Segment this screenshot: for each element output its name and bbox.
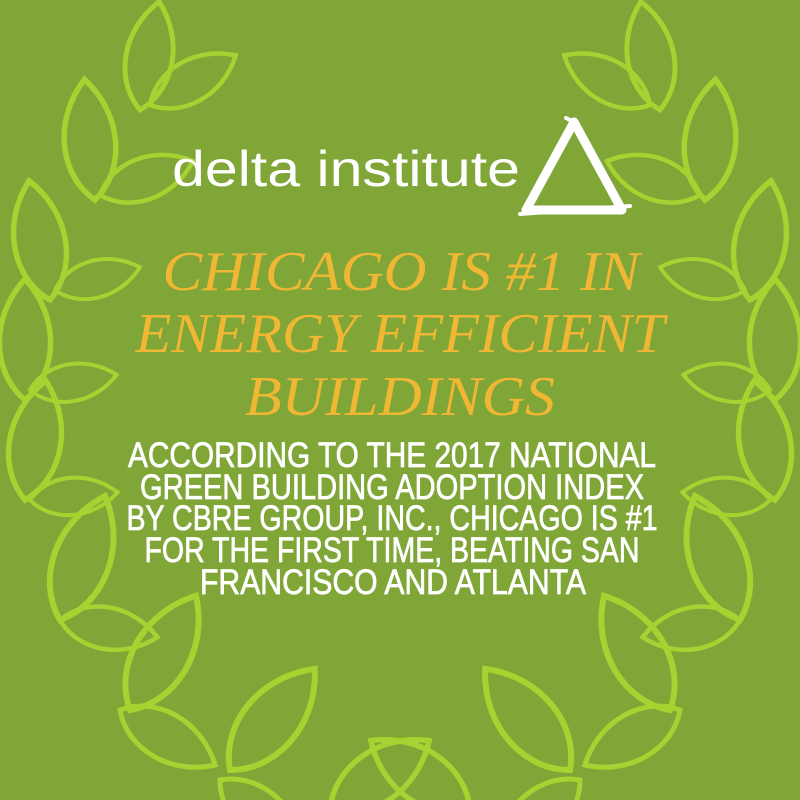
title: CHICAGO IS #1 IN	[162, 241, 642, 303]
body text: ACCORDING TO THE 2017 NATIONAL	[128, 435, 656, 475]
body text	[127, 435, 658, 602]
icon: delta triangle	[520, 118, 630, 214]
body text: BY CBRE GROUP, INC., CHICAGO IS #1	[127, 498, 658, 538]
title	[134, 241, 669, 428]
decorative laurel right	[356, 0, 800, 800]
body text: GREEN BUILDING ADOPTION INDEX	[140, 467, 644, 507]
body text: FRANCISCO AND ATLANTA	[200, 562, 587, 602]
body text: FOR THE FIRST TIME, BEATING SAN	[145, 530, 640, 570]
title: BUILDINGS	[245, 366, 555, 428]
logo: delta institute: delta institute	[172, 141, 520, 197]
logo: delta institute	[172, 118, 630, 214]
title: ENERGY EFFICIENT	[134, 303, 669, 365]
decorative laurel left	[0, 0, 444, 800]
